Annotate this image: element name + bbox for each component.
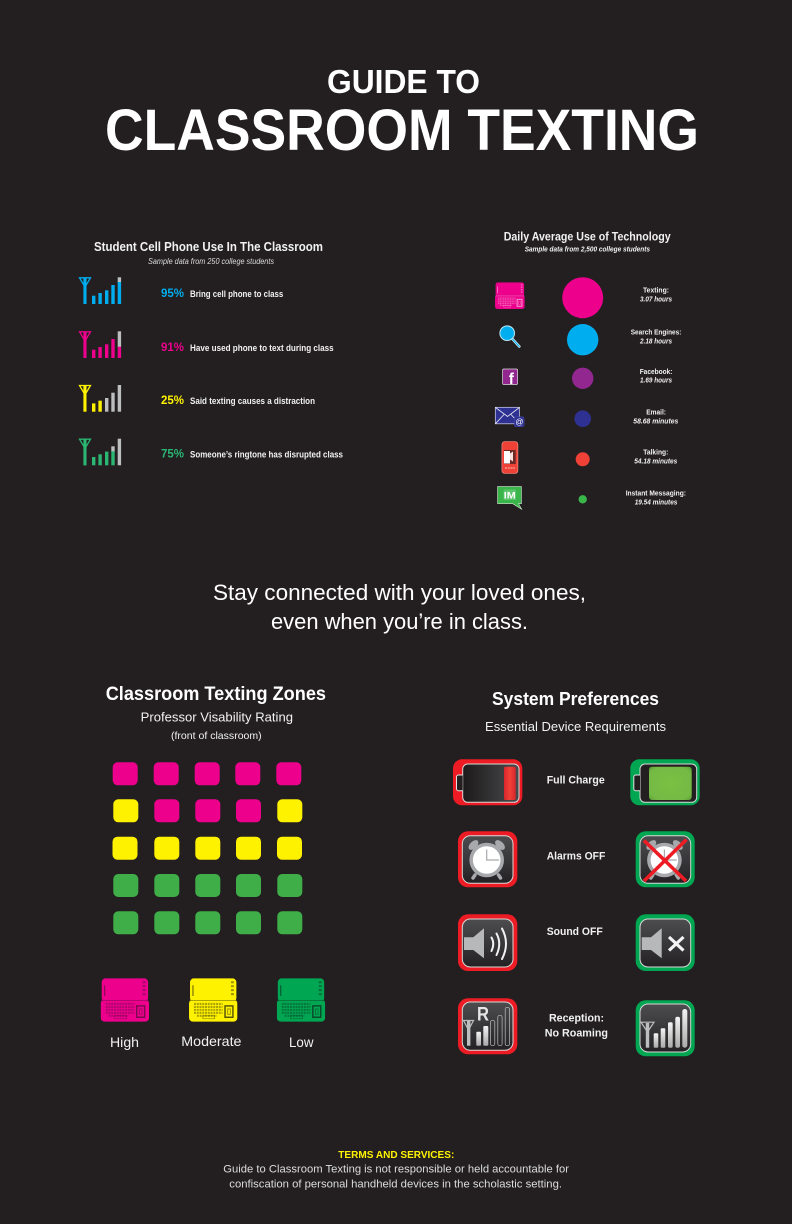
label: causes distraction: Said texting causes a distraction xyxy=(190,396,315,406)
heading: classroom texting zones: Classroom Texting Zones xyxy=(106,683,326,705)
bubble: search engines xyxy=(567,324,598,355)
panel: daily average use of technology xyxy=(495,231,686,509)
row: 75 percent ringtone xyxy=(80,439,343,465)
footer: terms and services: confiscation of personal handheld devices in the scholastic setting. xyxy=(229,1179,562,1191)
icon: email envelope xyxy=(495,407,524,427)
icon: alarm crossed out xyxy=(636,831,695,887)
icon: roaming reception xyxy=(458,998,517,1054)
icon: yellow signal bars xyxy=(80,385,121,412)
heading: student cell phone use: Student Cell Phone Use In The Classroom xyxy=(94,240,323,254)
label: email 58.68 minutes: 58.68 minutes xyxy=(633,419,678,426)
bubble: instant messaging xyxy=(578,495,587,503)
bubble: facebook xyxy=(572,368,593,389)
label: search engines 2.18 hours: Search Engines: xyxy=(631,329,681,336)
title xyxy=(105,63,699,163)
slogan: even when you’re in class. xyxy=(271,609,528,634)
icon: facebook xyxy=(503,369,518,388)
footer: terms and services: TERMS AND SERVICES: xyxy=(338,1149,454,1161)
icon: green signal bars xyxy=(80,439,121,465)
icon: magenta signal bars xyxy=(80,331,121,358)
label: facebook 1.69 hours xyxy=(640,369,672,385)
icon: low battery xyxy=(453,759,522,805)
heading: daily average use: Daily Average Use of Technology xyxy=(504,231,671,243)
icon: full battery xyxy=(630,759,700,805)
label: instant messaging 19.54 minutes xyxy=(626,490,686,506)
bubble: talking xyxy=(576,452,590,466)
label: reception no roaming: Reception: xyxy=(549,1013,604,1025)
slogan: Stay connected with your loved ones, xyxy=(213,580,586,605)
label: bring cell phone: Bring cell phone to class xyxy=(190,289,283,299)
legend: low: Low xyxy=(289,1034,314,1050)
subheading: professor visability rating: Professor Visability Rating xyxy=(141,710,293,725)
subheading: essential device requirements: Essential Device Requirements xyxy=(485,720,666,734)
row: 95 percent bring phone xyxy=(80,277,283,304)
stat: 25 percent: 25% xyxy=(161,395,184,407)
stat: 91 percent: 91% xyxy=(161,342,184,354)
title: CLASSROOM TEXTING xyxy=(105,98,699,163)
stat: 95 percent: 95% xyxy=(161,288,184,300)
footer: terms and services xyxy=(223,1149,569,1191)
legend: high: High xyxy=(110,1034,139,1050)
row: 25 percent distraction xyxy=(80,385,315,412)
label: facebook 1.69 hours: 1.69 hours xyxy=(640,378,672,385)
icon: cyan signal bars xyxy=(80,277,121,304)
subheading: sample size 2500: Sample data from 2,500 college students xyxy=(525,247,650,254)
icon: full reception xyxy=(636,1000,695,1056)
label: reception no roaming: No Roaming xyxy=(545,1027,608,1039)
label: ringtone disrupted: Someone’s ringtone has disrupted class xyxy=(190,449,343,459)
label: talking 54.18 minutes: Talking: xyxy=(643,449,668,456)
label: used phone to text: Have used phone to text during class xyxy=(190,343,334,353)
icon: sound on xyxy=(458,914,517,971)
slogan xyxy=(213,580,586,634)
label: reception no roaming xyxy=(545,1013,608,1039)
label: search engines 2.18 hours xyxy=(631,329,681,345)
legend: moderate xyxy=(181,978,242,1049)
footer: terms and services: Guide to Classroom Texting is not responsible or held accountable for xyxy=(223,1164,569,1176)
label: search engines 2.18 hours: 2.18 hours xyxy=(639,338,672,345)
legend: moderate: Moderate xyxy=(181,1033,242,1049)
icon: instant message bubble xyxy=(498,487,522,509)
label: talking 54.18 minutes xyxy=(634,449,677,465)
panel: student cell phone use xyxy=(80,240,343,465)
icon: roaming reception: R xyxy=(477,1005,489,1026)
label: alarms off: Alarms OFF xyxy=(547,850,606,862)
panel: system preferences xyxy=(453,689,700,1056)
seat grid xyxy=(112,762,302,934)
label: instant messaging 19.54 minutes: Instant Messaging: xyxy=(626,490,686,497)
icon: magnifying glass xyxy=(500,326,519,346)
label: texting 3.07 hours: Texting: xyxy=(643,288,669,295)
label: email 58.68 minutes xyxy=(633,410,678,426)
bubble: texting xyxy=(562,277,603,318)
heading: system preferences: System Preferences xyxy=(492,689,659,709)
icon: sound muted xyxy=(636,914,695,971)
icon: facebook: f xyxy=(509,371,515,388)
icon: alarm on xyxy=(458,831,517,887)
note: front of classroom: (front of classroom) xyxy=(171,730,262,742)
label: sound off: Sound OFF xyxy=(547,926,603,938)
icon: email envelope: @ xyxy=(515,417,524,426)
title: GUIDE TO xyxy=(327,63,480,100)
stat: 75 percent: 75% xyxy=(161,448,184,460)
icon: texting phone xyxy=(495,282,525,309)
label: texting 3.07 hours xyxy=(640,288,672,304)
label: texting 3.07 hours: 3.07 hours xyxy=(640,297,672,304)
label: full charge: Full Charge xyxy=(547,774,605,786)
subheading: sample size 250: Sample data from 250 college students xyxy=(148,257,274,266)
icon: instant message bubble: IM xyxy=(504,491,516,502)
bubble: email xyxy=(574,410,591,427)
icon: talking phone xyxy=(502,442,518,474)
label: facebook 1.69 hours: Facebook: xyxy=(640,369,672,376)
legend: low xyxy=(277,978,325,1050)
legend: high xyxy=(101,978,149,1050)
panel: classroom texting zones xyxy=(101,683,326,1050)
row: 91 percent text during class xyxy=(80,331,334,358)
label: talking 54.18 minutes: 54.18 minutes xyxy=(634,458,677,465)
label: instant messaging 19.54 minutes: 19.54 minutes xyxy=(635,499,677,506)
label: email 58.68 minutes: Email: xyxy=(646,410,666,417)
